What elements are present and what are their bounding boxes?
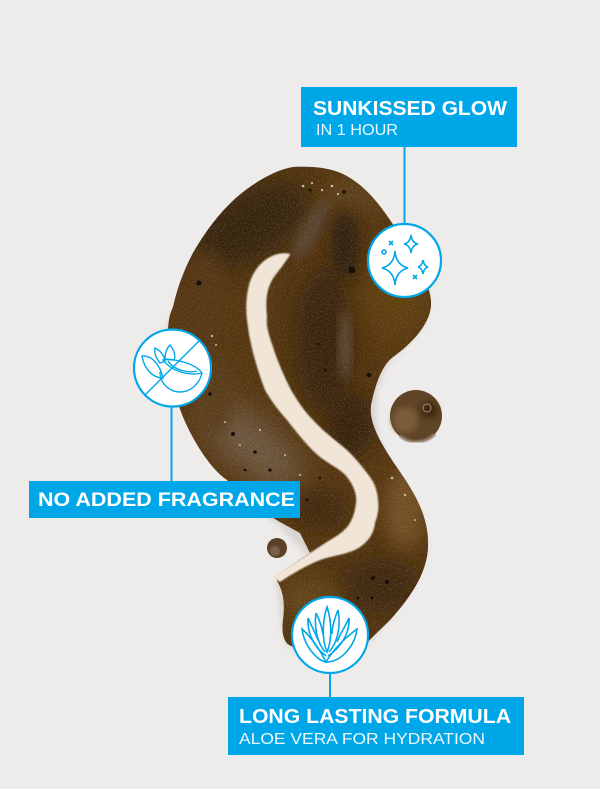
label box xyxy=(29,481,300,518)
icon: crossed-out coconut and leaves xyxy=(134,330,211,406)
heading: LONG LASTING FORMULA xyxy=(239,706,511,728)
connector line xyxy=(170,406,172,482)
label box xyxy=(228,697,524,755)
subheading: IN 1 HOUR xyxy=(316,122,398,139)
callout: sunkissed glow xyxy=(301,87,517,297)
drop shadow xyxy=(166,170,429,649)
foam droplet, left xyxy=(267,538,287,558)
foam droplet, right xyxy=(390,390,442,442)
heading: SUNKISSED GLOW xyxy=(313,98,507,120)
subheading: ALOE VERA FOR HYDRATION xyxy=(239,731,485,748)
callout: no added fragrance xyxy=(29,330,300,518)
connector line xyxy=(404,147,406,224)
heading: NO ADDED FRAGRANCE xyxy=(38,489,295,511)
infographic canvas xyxy=(29,87,524,755)
icon: sparkles xyxy=(368,224,441,297)
foam body xyxy=(168,166,432,660)
connector line xyxy=(329,673,331,698)
product swatch: bronzing foam smear xyxy=(166,166,442,660)
cream streak xyxy=(246,253,378,582)
callout: long lasting formula xyxy=(228,597,524,755)
label box xyxy=(301,87,517,147)
icon: aloe vera xyxy=(292,597,368,673)
